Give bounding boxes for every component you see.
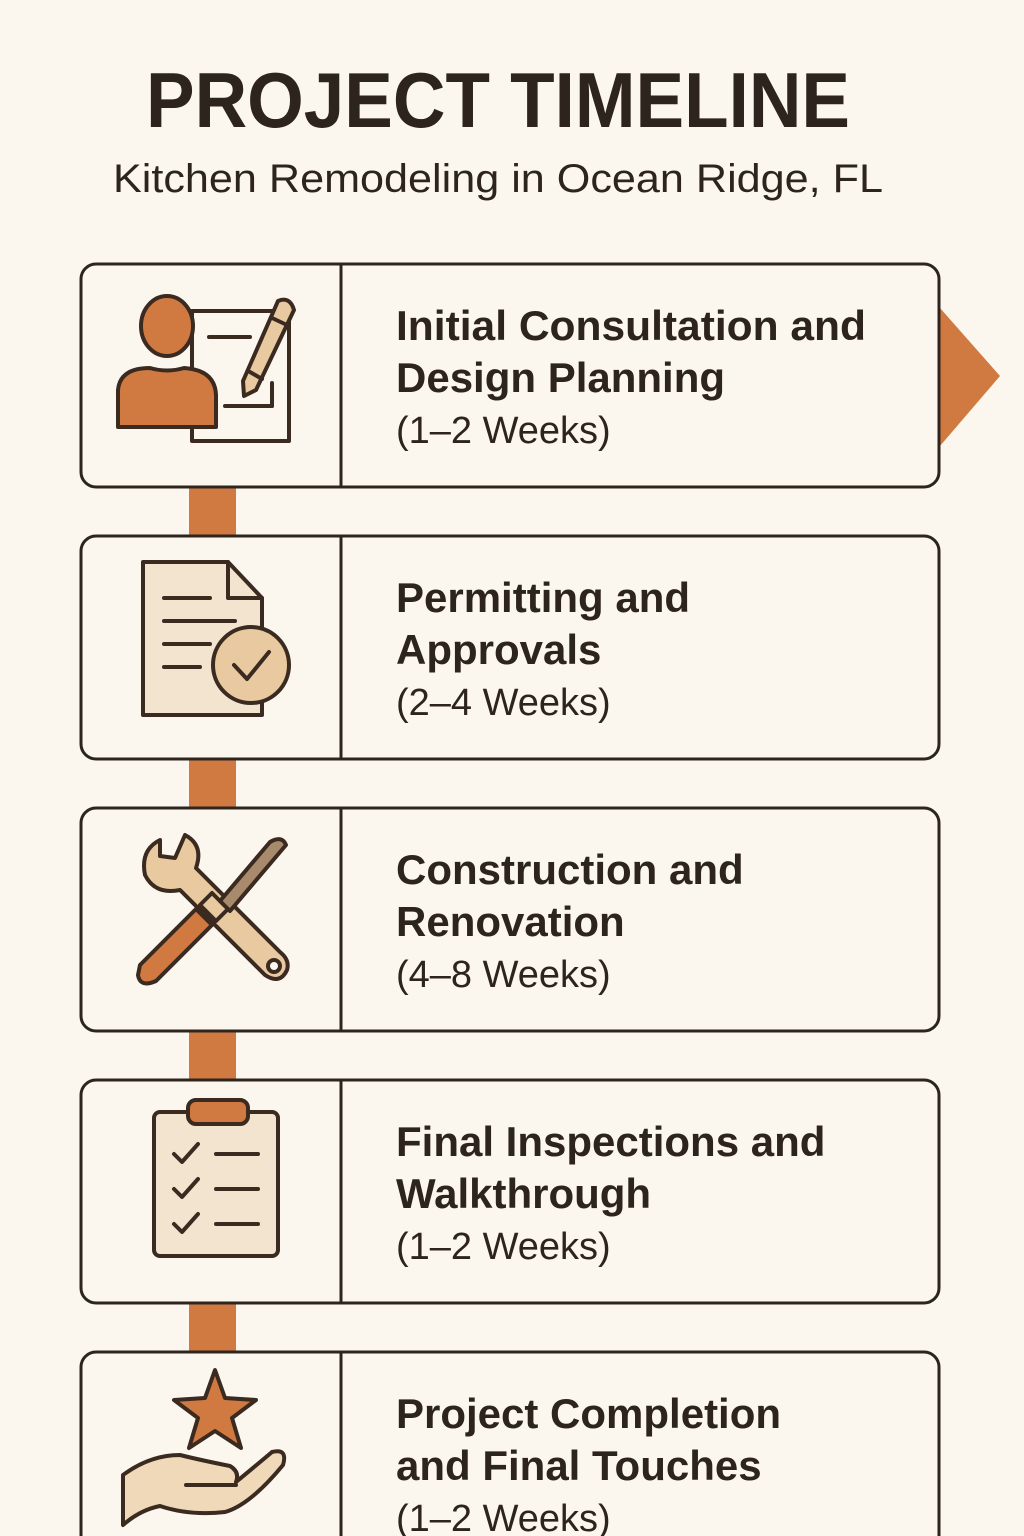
card 4 — [81, 1080, 939, 1303]
card 5 — [81, 1352, 939, 1536]
text: step 5: Project Completion — [396, 1390, 781, 1437]
subtitle: Kitchen Remodeling in Ocean Ridge, FL — [113, 157, 883, 201]
card 2: Approvals — [396, 626, 601, 673]
arrow: right pointer — [940, 308, 1000, 446]
card 3: (4–8 Weeks) — [396, 954, 611, 996]
card 1: Design Planning — [396, 354, 725, 401]
card 4: Walkthrough — [396, 1170, 651, 1217]
icon: document with check — [143, 562, 289, 715]
card 2 — [81, 536, 939, 759]
text: step 3: Construction and — [396, 846, 744, 893]
icon: person with design plan — [118, 296, 294, 441]
text: step 1: Initial Consultation and — [396, 302, 866, 349]
text: step 4: Final Inspections and — [396, 1118, 825, 1165]
title: PROJECT TIMELINE — [146, 56, 850, 144]
card 1 — [81, 264, 939, 487]
card 3: Renovation — [396, 898, 625, 945]
icon: wrench and screwdriver — [138, 835, 288, 983]
icon: clipboard checklist — [154, 1100, 278, 1256]
card 4: (1–2 Weeks) — [396, 1226, 611, 1268]
icon: hand with star — [123, 1370, 284, 1525]
connector bars — [189, 488, 236, 1352]
card 3 — [81, 808, 939, 1031]
card 2: (2–4 Weeks) — [396, 682, 611, 724]
card 5: and Final Touches — [396, 1442, 762, 1489]
text: step 2: Permitting and — [396, 574, 690, 621]
card 1: (1–2 Weeks) — [396, 410, 611, 452]
